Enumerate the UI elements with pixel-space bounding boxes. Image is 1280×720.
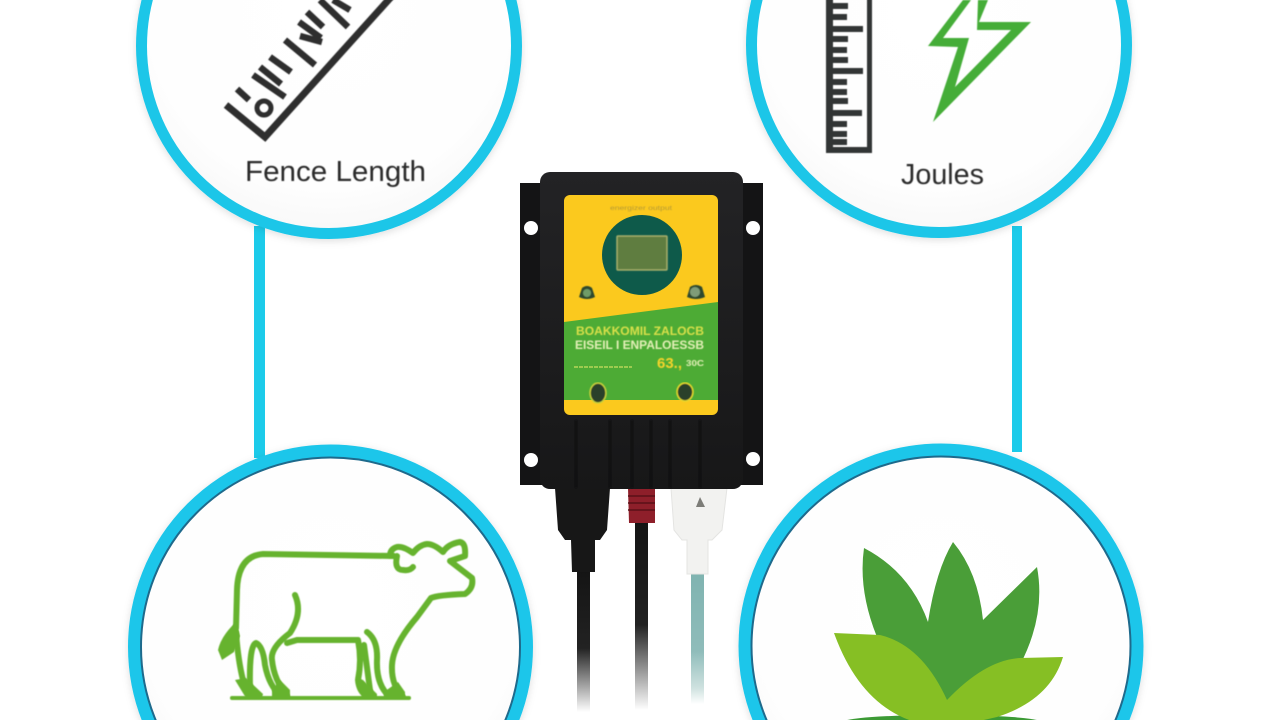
dark leaves	[863, 542, 1039, 702]
icon: vertical ruler	[826, 0, 872, 153]
light leaves	[834, 633, 1063, 720]
icon: plant leaves	[834, 542, 1063, 720]
teal cable	[691, 572, 704, 704]
white plug	[671, 488, 727, 574]
display bezel	[602, 215, 682, 295]
connector: left vertical line	[254, 226, 265, 458]
green field	[564, 302, 718, 400]
panel: fence length circle	[142, 0, 516, 234]
terminal knobs	[590, 383, 693, 403]
label text: EISEIL I ENPALOESSB	[575, 338, 704, 352]
label: Fence Length: Fence Length	[245, 156, 426, 188]
ground base	[843, 715, 1041, 720]
housing ribs	[576, 420, 700, 488]
device: fence energizer	[520, 172, 763, 489]
icon: cow outline	[232, 542, 472, 698]
label text: 63.,	[657, 355, 682, 372]
red plug	[628, 488, 655, 523]
icon: cow hooves and tail	[218, 622, 405, 698]
front label	[564, 195, 718, 415]
black plug	[555, 488, 610, 572]
tiny header text: energizer output	[610, 205, 672, 212]
indicator lights	[579, 285, 705, 299]
connector: right vertical line	[1012, 226, 1022, 452]
icon: diagonal ruler	[226, 0, 392, 137]
LCD screen	[617, 236, 667, 270]
mounting flanges	[520, 183, 763, 485]
red lead cable	[635, 520, 648, 710]
black cable	[577, 570, 590, 712]
panel: joules circle	[752, 0, 1126, 232]
panel: livestock circle	[134, 451, 526, 720]
label: Joules: Joules	[901, 159, 984, 191]
housing	[540, 172, 743, 489]
icon: lightning bolt	[928, 0, 1031, 122]
mounting holes	[524, 221, 760, 467]
label text: 30C	[686, 359, 704, 368]
panel: plants circle	[745, 450, 1137, 720]
cables below the device	[555, 488, 727, 712]
label text: BOAKKOMIL ZALOCB	[576, 324, 704, 338]
label text	[575, 324, 704, 372]
